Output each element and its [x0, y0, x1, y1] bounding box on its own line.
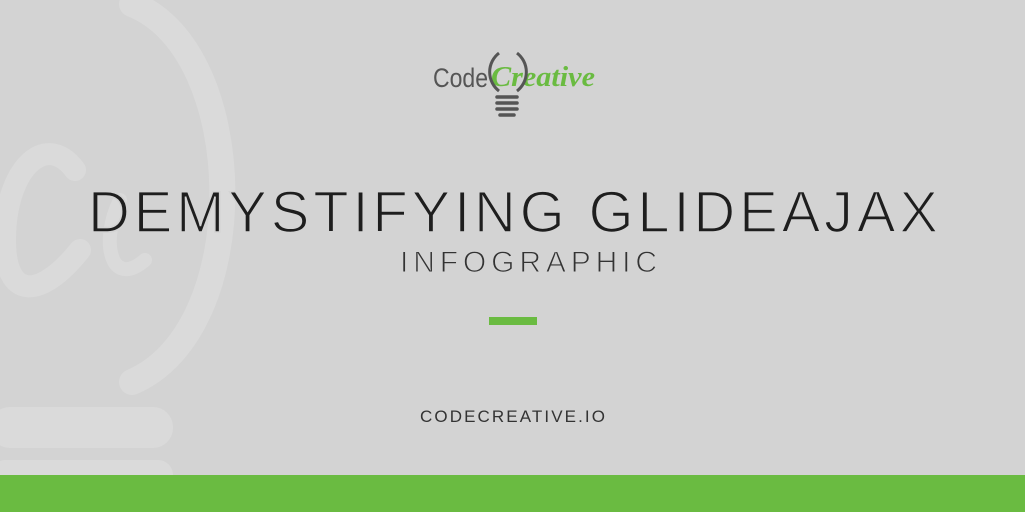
bottom green bar	[0, 475, 1025, 512]
website url: CODECREATIVE.IO	[420, 407, 605, 426]
subtitle: INFOGRAPHIC	[400, 246, 657, 279]
logo: Creative	[491, 62, 595, 93]
logo	[433, 53, 595, 115]
green dash	[489, 317, 537, 325]
title: DEMYSTIFYING GLIDEAJAX	[88, 180, 938, 245]
logo: Code	[433, 63, 488, 93]
